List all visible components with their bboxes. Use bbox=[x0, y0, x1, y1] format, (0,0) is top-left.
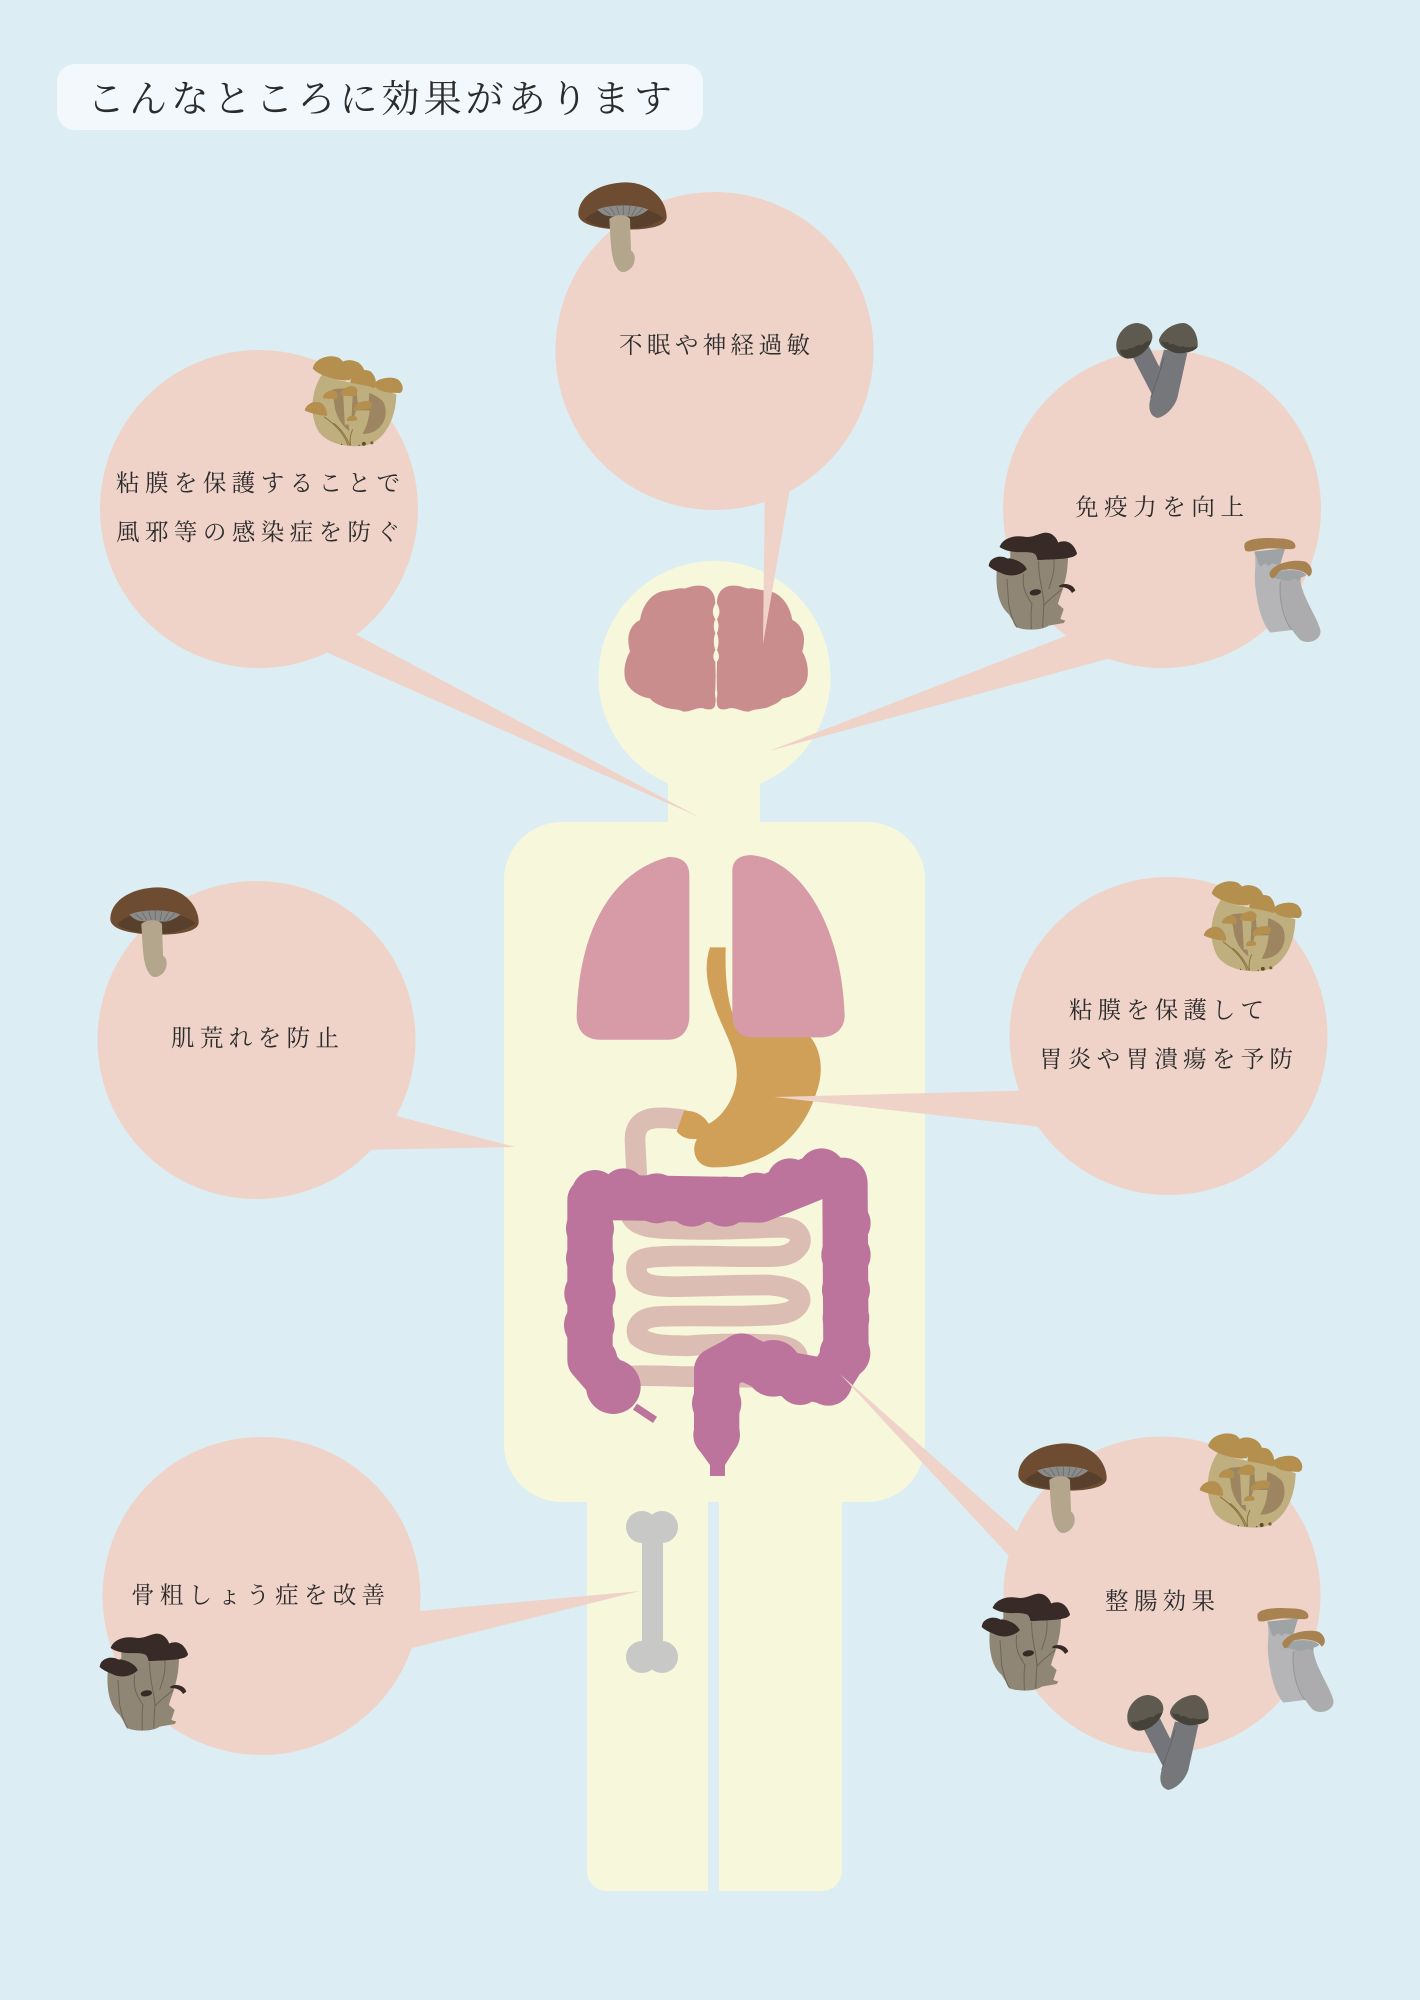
panel: protect mucosa, prevent gastritis and ulcers: 粘膜を保護して bbox=[1069, 997, 1264, 1024]
panel: protect mucosa, prevent gastritis and ulcers: 胃炎や胃潰瘍を予防 bbox=[1039, 1046, 1293, 1073]
panel: insomnia and nervous sensitivity: 不眠や神経過敏 bbox=[619, 332, 810, 359]
organ: large intestine bbox=[564, 1148, 871, 1476]
organ: stomach bbox=[677, 947, 821, 1167]
organs: abdomen group bbox=[564, 855, 871, 1476]
panel: intestinal regulation bbox=[840, 1374, 1333, 1790]
panel: boost immunity: 免疫力を向上 bbox=[1075, 494, 1244, 521]
panel: boost immunity bbox=[769, 323, 1321, 751]
panel: protect mucosa, prevent colds: 粘膜を保護することで bbox=[116, 470, 400, 497]
organ: bone bbox=[626, 1511, 678, 1673]
panel: protect mucosa, prevent colds bbox=[100, 350, 699, 817]
panel: improve osteoporosis: 骨粗しょう症を改善 bbox=[131, 1582, 385, 1609]
panel: protect mucosa, prevent colds: 風邪等の感染症を防ぐ bbox=[116, 519, 400, 546]
panel: prevent rough skin: 肌荒れを防止 bbox=[171, 1025, 339, 1052]
panel: intestinal regulation: 整腸効果 bbox=[1105, 1588, 1215, 1615]
human body silhouette bbox=[504, 561, 925, 1891]
title bbox=[57, 64, 703, 130]
panel: improve osteoporosis bbox=[100, 1437, 640, 1755]
panel: protect mucosa, prevent gastritis and ulcers bbox=[774, 877, 1328, 1195]
organ: brain bbox=[624, 586, 808, 712]
panel: prevent rough skin bbox=[98, 881, 515, 1199]
title: こんなところに効果があります bbox=[87, 79, 672, 121]
organ: lungs bbox=[577, 855, 845, 1040]
panel: insomnia and nervous sensitivity bbox=[556, 182, 874, 644]
organ: small intestine bbox=[630, 1118, 800, 1378]
